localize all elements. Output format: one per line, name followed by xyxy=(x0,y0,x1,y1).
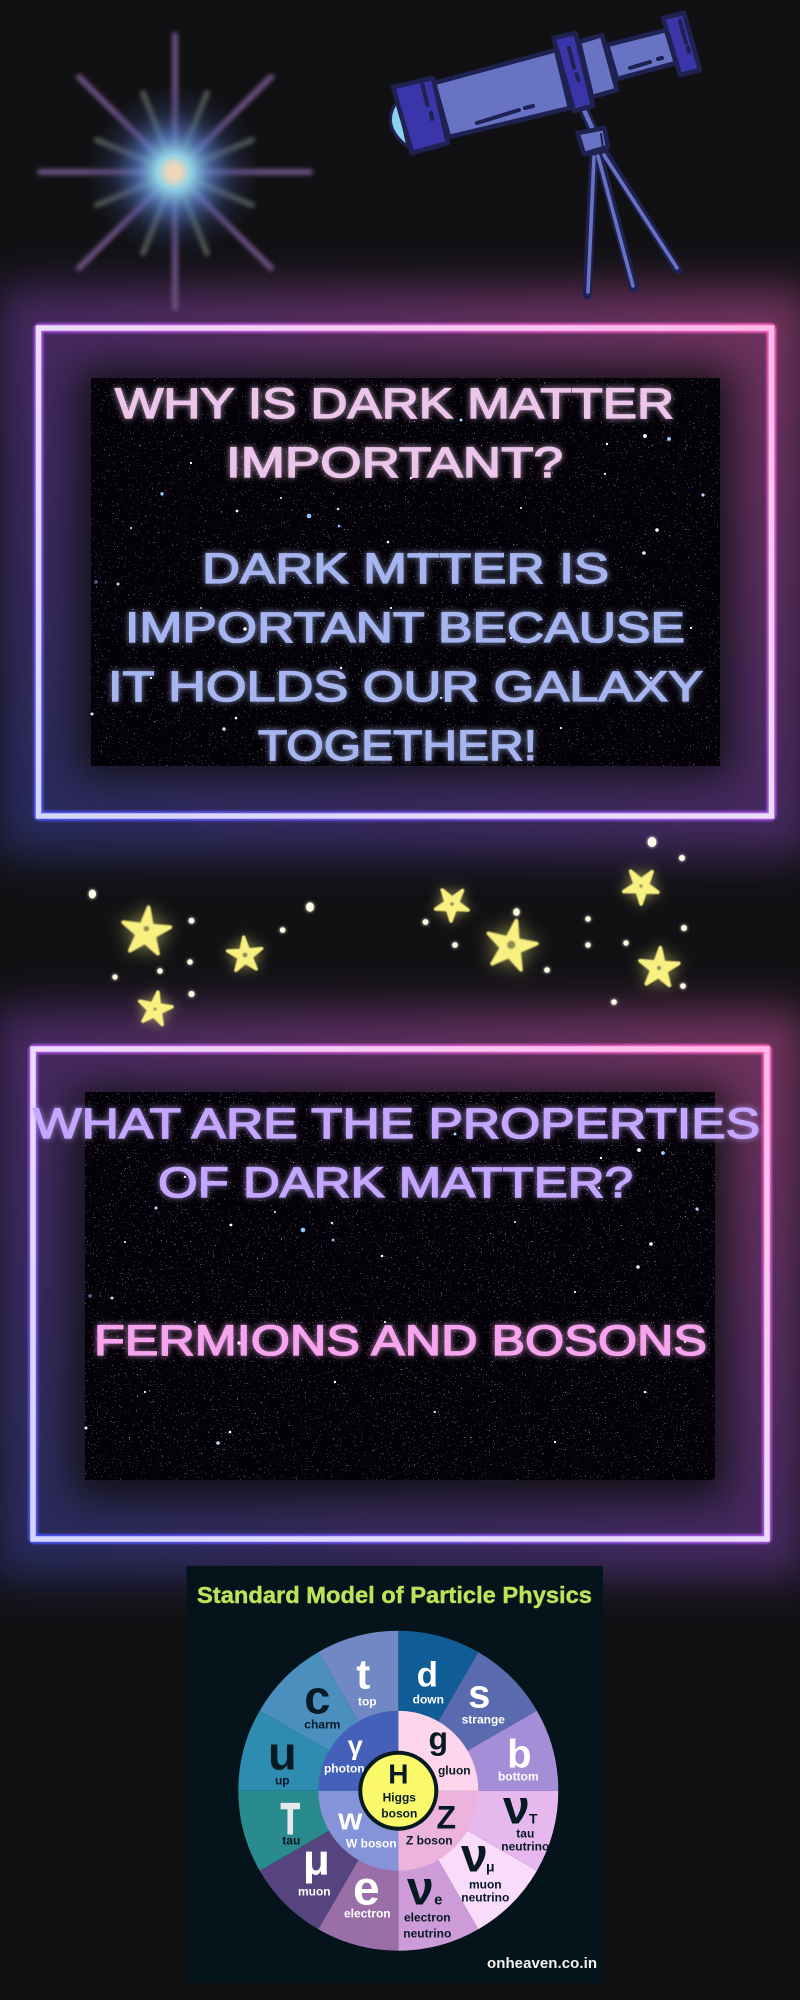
telescope tripod xyxy=(578,110,678,295)
boson labels: gluon xyxy=(438,1764,471,1778)
heading: what are the properties: OF DARK MATTER? xyxy=(158,1159,633,1207)
panel: properties of dark matter xyxy=(33,1049,767,1539)
fermion labels: e xyxy=(434,1892,442,1909)
fermion labels: neutrino xyxy=(461,1891,509,1905)
white dots xyxy=(89,837,687,1005)
fermion labels: tau xyxy=(282,1834,300,1848)
fermion labels xyxy=(268,1651,549,1941)
fermion labels: muon xyxy=(469,1878,502,1892)
boson labels: γ xyxy=(348,1731,363,1761)
boson labels: photon xyxy=(324,1762,365,1776)
fermion labels: down xyxy=(413,1693,444,1707)
boson labels xyxy=(324,1721,471,1851)
answer text: IMPORTANT BECAUSE xyxy=(125,604,685,652)
doodle stars cluster xyxy=(89,837,687,1026)
answer text xyxy=(108,545,703,770)
fermion labels: top xyxy=(358,1695,377,1709)
star 6 xyxy=(617,861,664,908)
star 5 xyxy=(482,915,541,972)
fermion labels: tau xyxy=(516,1827,534,1841)
source credit: onheaven.co.in xyxy=(487,1955,597,1972)
higgs boson centre xyxy=(360,1753,436,1829)
higgs boson centre: H xyxy=(388,1759,408,1790)
heading: why is dark matter important xyxy=(115,380,674,487)
telescope xyxy=(390,13,700,295)
outer fermion segments xyxy=(238,1631,558,1951)
fermion labels: s xyxy=(468,1673,490,1717)
starburst xyxy=(40,35,310,308)
telescope lens xyxy=(390,100,408,147)
fermion labels: ν xyxy=(503,1782,530,1835)
heading: what are the properties xyxy=(33,1100,760,1207)
fermion labels: μ xyxy=(303,1836,330,1885)
fermion labels: μ xyxy=(486,1859,495,1875)
fermion labels: c xyxy=(304,1671,330,1724)
star 4 xyxy=(430,880,475,925)
fermion labels: ν xyxy=(407,1863,434,1916)
answer text: DARK MTTER IS xyxy=(202,545,609,593)
fermion labels: strange xyxy=(462,1713,505,1727)
fermion labels: d xyxy=(417,1656,438,1695)
answer: fermions and bosons: FERMIONS AND BOSONS xyxy=(94,1317,707,1365)
chart title: Standard Model of Particle Physics xyxy=(197,1582,592,1608)
fermion labels: u xyxy=(268,1727,297,1780)
panel: why is dark matter important xyxy=(38,328,772,816)
star 3 xyxy=(136,989,174,1026)
fermion labels: ν xyxy=(461,1830,488,1883)
inner boson quadrants xyxy=(318,1711,478,1871)
fermion labels: electron xyxy=(344,1907,391,1921)
fermion labels: muon xyxy=(298,1885,331,1899)
panel glow and neon frame xyxy=(38,328,772,816)
fermion labels: neutrino xyxy=(403,1927,451,1941)
panel: standard model of particle physics xyxy=(186,1566,603,1983)
fermion labels: electron xyxy=(404,1911,451,1925)
particle wheel xyxy=(238,1631,558,1951)
heading: why is dark matter important: WHY IS DARK MATTER xyxy=(115,380,674,428)
boson labels: Z boson xyxy=(406,1834,453,1848)
boson labels: Z xyxy=(437,1800,456,1836)
heading: what are the properties: WHAT ARE THE PROPERTIES xyxy=(33,1100,760,1148)
boson labels: w xyxy=(337,1802,363,1837)
fermion labels: t xyxy=(356,1651,370,1698)
panel background xyxy=(186,1566,603,1983)
fermion labels: up xyxy=(275,1774,290,1788)
higgs boson centre: boson xyxy=(381,1807,417,1821)
higgs boson centre: Higgs xyxy=(383,1791,416,1805)
fermion labels: b xyxy=(507,1733,532,1777)
star 7 xyxy=(639,946,680,986)
fermion labels: T xyxy=(281,1795,300,1844)
starfield image xyxy=(84,1092,715,1480)
boson labels: W boson xyxy=(346,1837,397,1851)
answer text: IT HOLDS OUR GALAXY xyxy=(108,663,703,711)
star 1 xyxy=(121,905,172,955)
fermion labels: e xyxy=(353,1863,380,1916)
boson labels: g xyxy=(429,1721,448,1757)
fermion labels: neutrino xyxy=(501,1840,549,1854)
panel glow and neon frame xyxy=(33,1049,767,1539)
heading: why is dark matter important: IMPORTANT? xyxy=(226,439,563,487)
starfield image xyxy=(90,378,720,766)
fermion labels: bottom xyxy=(498,1770,539,1784)
telescope tube xyxy=(393,13,700,153)
answer text: TOGETHER! xyxy=(258,722,537,770)
fermion labels: T xyxy=(529,1811,538,1827)
fermion labels: charm xyxy=(304,1718,340,1732)
star 2 xyxy=(227,936,263,971)
